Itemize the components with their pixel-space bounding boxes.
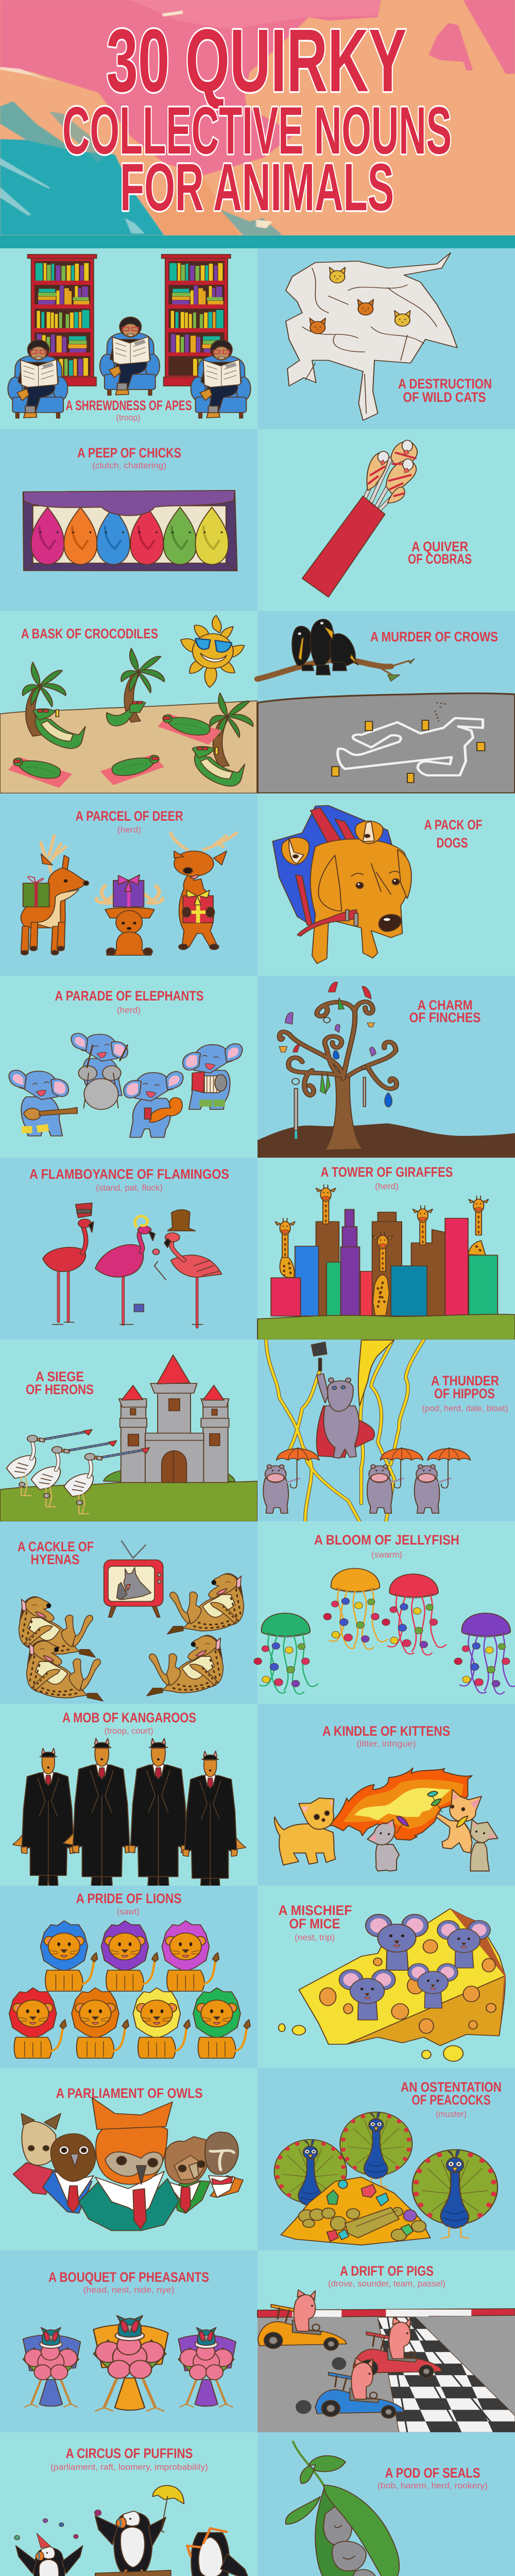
panel: mob of kangaroos [0, 1704, 258, 1907]
heading: OF HIPPOS [434, 1386, 495, 1401]
heading: (clutch, chattering) [92, 461, 166, 470]
heading: HYENAS [31, 1552, 79, 1567]
background [0, 248, 258, 429]
castle and herons [0, 1355, 258, 1521]
heading [408, 539, 472, 567]
background [0, 2432, 258, 2576]
pea pod of seals [286, 2442, 399, 2576]
heading [50, 2446, 208, 2472]
heading: A MOB OF KANGAROOS [62, 1710, 196, 1725]
heading: A PARLIAMENT OF OWLS [56, 2086, 203, 2101]
heading: (nest, trip) [295, 1933, 335, 1942]
background [0, 976, 258, 1158]
heading: (sawt) [117, 1907, 140, 1917]
heading: OF COBRAS [408, 551, 472, 567]
panel: thunder of hippos [258, 1340, 515, 1521]
background [0, 1521, 258, 1704]
heading [29, 1166, 229, 1193]
television and hyenas [19, 1541, 244, 1701]
cheese and mice [279, 1909, 506, 2061]
lightning and hippos [263, 1340, 470, 1521]
heading: A PACK OF [424, 817, 482, 833]
background [0, 1704, 258, 1886]
panel: tower of giraffes [258, 1158, 515, 1340]
teal band [0, 235, 515, 248]
heading: (herd) [117, 1005, 141, 1015]
three flamingos [43, 1203, 222, 1327]
background [258, 2068, 515, 2250]
heading [76, 1891, 181, 1917]
panel: mischief of mice [258, 1886, 515, 2068]
dog with backpack [272, 806, 411, 963]
heading [328, 2263, 445, 2289]
chick display box [23, 490, 237, 571]
heading [314, 1532, 459, 1560]
panel: drift of pigs [258, 2250, 515, 2432]
heading: A PARCEL OF DEER [75, 808, 183, 824]
heading: A MISCHIEF [278, 1903, 352, 1918]
heading [422, 1373, 508, 1413]
heading [377, 2465, 488, 2490]
heading: (parliament, raft, loomery, improbability) [50, 2462, 208, 2472]
heading: OF MICE [289, 1916, 340, 1931]
heading: (swarm) [371, 1550, 402, 1560]
heading: A BOUQUET OF PHEASANTS [48, 2269, 209, 2285]
header background [0, 0, 515, 235]
background [258, 793, 515, 976]
background [258, 1886, 515, 2068]
heading: A SHREWDNESS OF APES [66, 398, 192, 413]
kangaroos in suits [13, 1738, 246, 1907]
heading [322, 1723, 450, 1749]
peacocks and treasure [274, 2112, 497, 2245]
heading [55, 988, 204, 1015]
shredded paper and cats [286, 253, 457, 420]
background [258, 1704, 515, 1886]
heading: A SIEGE [36, 1369, 84, 1384]
background [258, 248, 515, 429]
background [258, 429, 515, 611]
heading [66, 398, 192, 422]
heading: A PRIDE OF LIONS [76, 1891, 181, 1906]
heading: A POD OF SEALS [385, 2465, 480, 2481]
title [62, 10, 452, 225]
heading: A KINDLE OF KITTENS [322, 1723, 450, 1739]
heading: A DESTRUCTION [398, 376, 492, 392]
heading [75, 808, 183, 835]
heading: (muster) [436, 2109, 467, 2119]
background [0, 1158, 258, 1340]
kittens and flame [274, 1768, 498, 1871]
panel: peep of chicks [0, 429, 258, 611]
race track and pig karts [258, 2290, 515, 2432]
heading [409, 997, 481, 1025]
heading [320, 1164, 453, 1191]
heading [48, 2269, 209, 2295]
seven lions [9, 1921, 250, 2058]
heading [398, 376, 492, 405]
heading: (herd) [117, 825, 141, 835]
heading [26, 1369, 94, 1397]
panel: pod of seals [258, 2432, 515, 2576]
heading: (troop, court) [104, 1726, 153, 1736]
panel: parade of elephants [0, 976, 258, 1158]
panel: pride of lions [0, 1886, 258, 2068]
heading: (pod, herd, dale, bloat) [422, 1403, 508, 1413]
heading: DOGS [437, 835, 468, 851]
background [0, 793, 258, 976]
heading: OF WILD CATS [403, 389, 486, 405]
heading: A CHARM [417, 997, 473, 1013]
heading: A PARADE OF ELEPHANTS [55, 988, 204, 1004]
background [258, 611, 515, 793]
heading: OF HERONS [26, 1382, 94, 1397]
heading: A QUIVER [411, 539, 468, 554]
panel: parliament of owls [0, 2068, 258, 2250]
elephant band [9, 1033, 243, 1138]
panel: murder of crows [258, 611, 515, 793]
background [258, 1521, 515, 1704]
panel: cackle of hyenas [0, 1521, 258, 1704]
heading: A FLAMBOYANCE OF FLAMINGOS [29, 1166, 229, 1182]
heading: (litter, intrigue) [356, 1739, 416, 1749]
juggling puffins [14, 2485, 250, 2576]
panel: bask of crocodiles [0, 611, 258, 793]
heading: (bob, harem, herd, rookery) [377, 2481, 488, 2490]
background [258, 2250, 515, 2432]
panel: ostentation of peacocks [258, 2068, 515, 2250]
heading: A DRIFT OF PIGS [340, 2263, 434, 2279]
heading: (troop) [116, 413, 140, 422]
background [0, 1886, 258, 2068]
panel: circus of puffins [0, 2432, 258, 2576]
jellyfish with flowers [254, 1568, 515, 1694]
skyline and giraffes [258, 1185, 515, 1340]
quiver and cobras [302, 440, 417, 597]
panel: flamboyance of flamingos [0, 1158, 258, 1340]
beach scene [0, 615, 258, 793]
heading: OF PEACOCKS [412, 2092, 490, 2108]
heading [62, 1710, 196, 1736]
panel: shrewdness of apes [0, 248, 258, 429]
background [258, 1340, 515, 1521]
panel: bloom of jellyfish [254, 1521, 515, 1704]
background [0, 2250, 258, 2432]
heading [401, 2079, 502, 2119]
heading: A BLOOM OF JELLYFISH [314, 1532, 459, 1548]
panel: pack of dogs [258, 793, 515, 976]
pheasant bouquets [23, 2316, 236, 2411]
background [0, 1340, 258, 1521]
panel: kindle of kittens [258, 1704, 515, 1886]
heading: (head, nest, nide, nye) [83, 2285, 174, 2295]
panel: bouquet of pheasants [0, 2250, 258, 2432]
heading: A THUNDER [431, 1373, 499, 1388]
heading: (drove, sounder, team, passel) [328, 2279, 445, 2289]
crows and crime scene [258, 619, 515, 793]
heading: (stand, pat, flock) [96, 1183, 163, 1193]
tree with charms [258, 982, 515, 1158]
heading: A PEEP OF CHICKS [77, 445, 181, 461]
heading [278, 1903, 352, 1942]
heading: OF FINCHES [409, 1010, 481, 1025]
heading [424, 817, 482, 851]
heading: A CACKLE OF [18, 1539, 94, 1554]
panel: parcel of deer [0, 793, 258, 976]
bookcases and apes [8, 255, 251, 418]
deer with gifts [21, 833, 236, 955]
background [258, 1158, 515, 1340]
background [0, 429, 258, 611]
background [258, 2432, 515, 2576]
heading [77, 445, 181, 470]
panel: destruction of wild cats [258, 248, 515, 429]
heading: A BASK OF CROCODILES [21, 626, 158, 641]
background [258, 976, 515, 1158]
panel: quiver of cobras [258, 429, 515, 611]
owls in suits [13, 2097, 243, 2231]
heading: A CIRCUS OF PUFFINS [66, 2446, 193, 2461]
panel: siege of herons [0, 1340, 258, 1521]
background [0, 611, 258, 793]
background [0, 2068, 258, 2250]
heading [18, 1539, 94, 1567]
heading: (herd) [375, 1181, 399, 1191]
panel: charm of finches [258, 976, 515, 1158]
heading: A TOWER OF GIRAFFES [320, 1164, 453, 1180]
